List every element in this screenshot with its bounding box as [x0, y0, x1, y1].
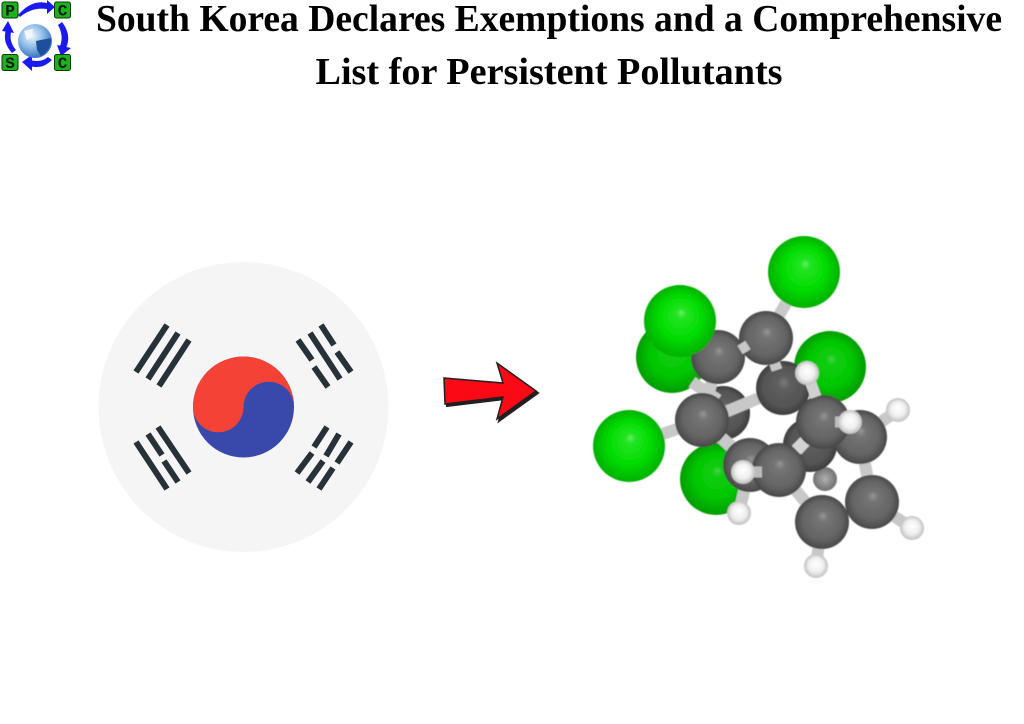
- chlorine far left: [593, 410, 665, 482]
- trigram bars: [136, 325, 351, 489]
- icon: C box bottom: C: [58, 55, 68, 73]
- taegeuk symbol: [193, 356, 294, 458]
- logo: [2, 0, 71, 73]
- title: South Korea Declares Exemptions and a Comprehensive: [96, 0, 1002, 40]
- hydrogen atoms outer: [727, 398, 924, 578]
- chlorine front left: [644, 285, 716, 357]
- bonds back: [629, 272, 912, 566]
- arrow: [444, 363, 538, 421]
- icon: C box top: C: [58, 2, 68, 20]
- molecule: [593, 236, 924, 578]
- chlorine top: [768, 236, 840, 308]
- front hydrogens: [731, 361, 862, 484]
- back atoms: [636, 321, 866, 515]
- South Korea flag: [98, 262, 388, 552]
- icon: cycle arrows: [2, 0, 71, 71]
- icon: P box: P: [5, 2, 15, 20]
- carbon atoms: [675, 311, 899, 549]
- icon: globe: [18, 24, 52, 58]
- title: [96, 0, 1002, 93]
- title: List for Persistent Pollutants: [315, 51, 783, 93]
- icon: S box: S: [5, 55, 15, 73]
